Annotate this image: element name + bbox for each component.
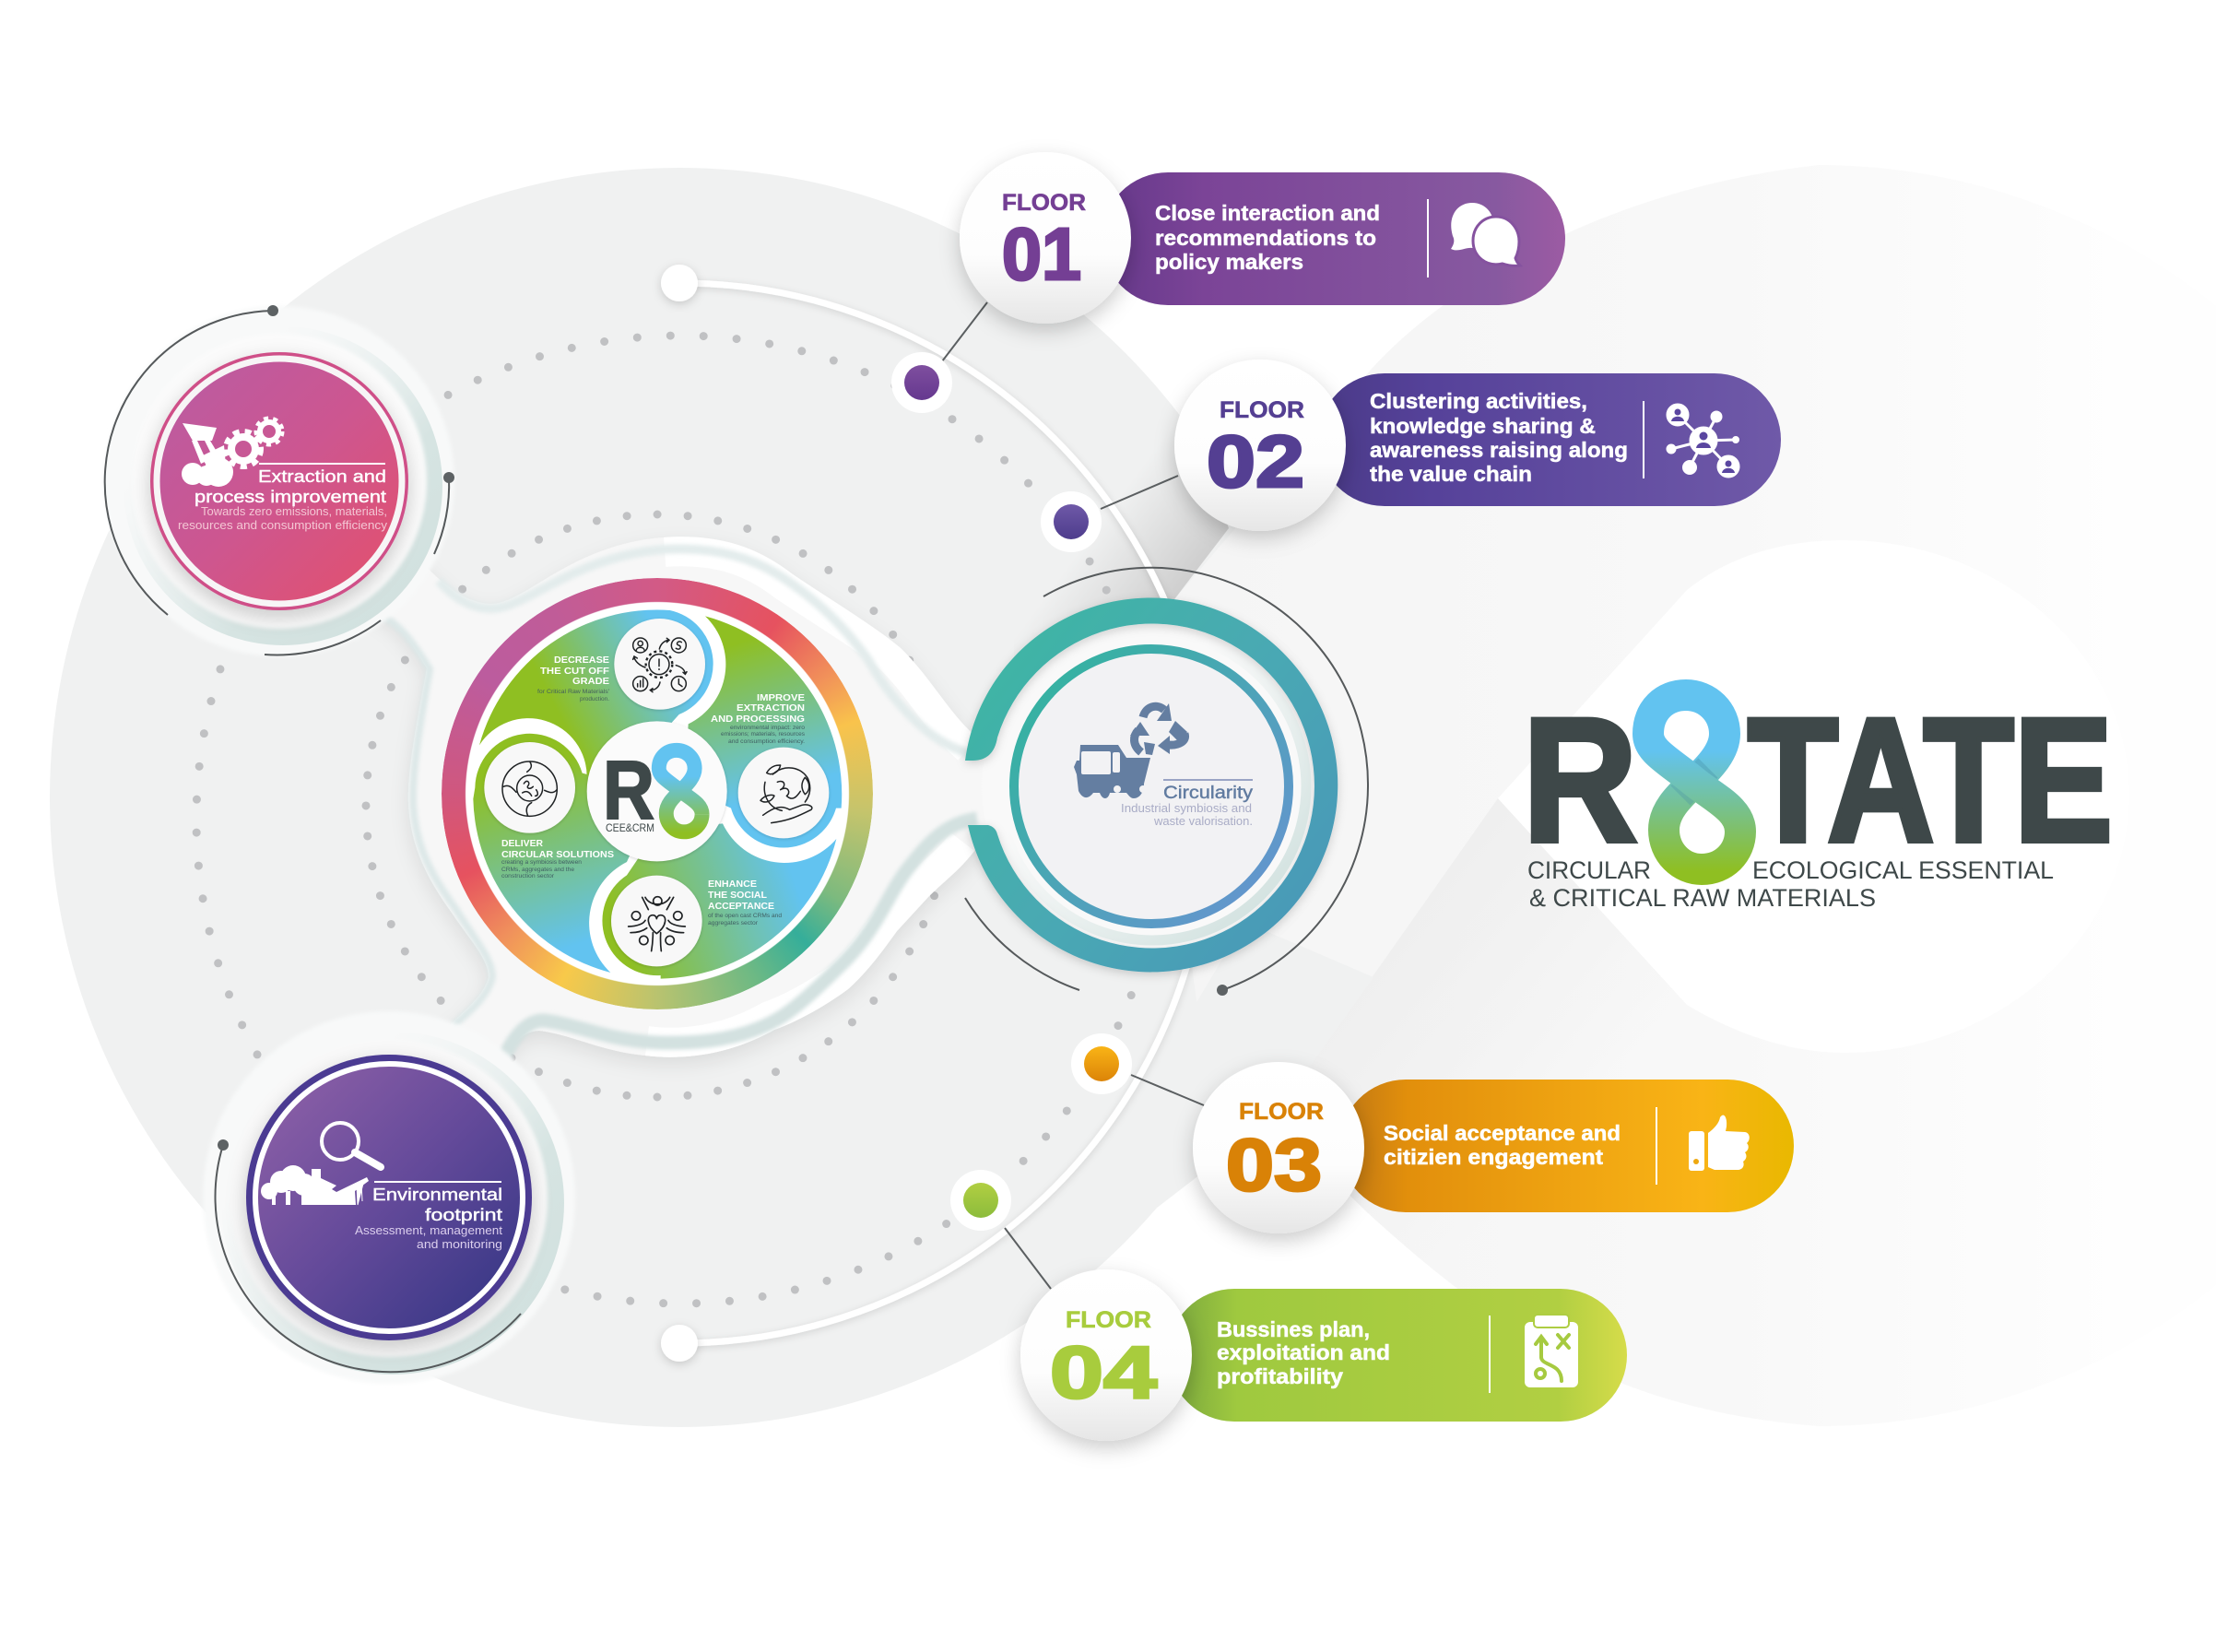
note: creating a symbiosis: construction sector [501,873,555,879]
lower strand, darker near the crossing [1272,798,1844,1427]
description [355,1223,502,1251]
halo: purple circle [203,1011,575,1384]
text: policy makers [1155,250,1303,274]
thin arcs [105,311,1368,1372]
text [1384,1121,1621,1169]
label: decrease the cut off grade [540,655,610,687]
text: profitability [1217,1364,1343,1388]
logo: R8TATE: TATE [1748,682,2113,879]
text: Clustering activities, [1370,389,1587,413]
heading: process improvement [194,488,386,506]
label: deliver circular solutions: DELIVER [501,838,543,849]
note: creating a symbiosis: creating a symbiosis between [501,859,582,866]
heading: footprint [425,1206,502,1224]
label: improve extraction and processing [711,692,805,725]
description: Towards zero emissions, materials, [201,504,387,518]
panel: central wheel [473,610,842,979]
floor 01 connector and dot [891,302,987,413]
badge [1193,1062,1364,1233]
panel: floor 03: 03 [1226,1124,1322,1206]
thin arc end dots [218,305,1228,1150]
note: for critical raw materials: production. [580,696,609,702]
panel: floor 02: 02 [1207,420,1304,502]
connector teal shading: lower edge [500,819,977,1069]
text: awareness raising along [1370,438,1628,462]
icon: thumbs up [1689,1115,1750,1171]
note: for critical raw materials [537,689,609,702]
text: the value chain [1370,462,1532,486]
note: environmental impact: and consumption efficiency. [728,738,805,745]
label: enhance the social acceptance: ENHANCE [708,879,757,890]
outer teal ring [965,597,1338,972]
panel: environmental footprint [246,1055,532,1340]
pale right lobe of infinity shape [1169,165,2216,1426]
floor 02 connector and dot [1041,476,1178,552]
icon: decrease cut off grade [633,638,687,692]
panel: floor 04: FLOOR [1066,1307,1151,1333]
icon: heart with people [629,897,685,951]
note: for critical raw materials: for Critical Raw Materials' [537,689,609,695]
connector teal shading: upper edge [439,549,977,756]
panel: floor 02 [1174,360,1781,531]
label: enhance the social acceptance: THE SOCIAL [708,890,768,901]
description: waste valorisation. [1153,814,1253,828]
icon: clipboard plan [1525,1315,1578,1387]
description: Assessment, management [355,1223,502,1237]
logo: R8TATE [1523,682,2113,912]
note: creating a symbiosis [501,859,582,879]
panel: floor 03 [1193,1062,1794,1233]
text: recommendations to [1155,226,1376,250]
floor 03 connector and dot [1071,1033,1204,1105]
description: Industrial symbiosis and [1121,801,1252,815]
logo: R8 in wheel [603,745,702,837]
text: citizien engagement [1384,1145,1603,1169]
tagline: CIRCULAR [1527,856,1651,884]
text: knowledge sharing & [1370,414,1596,438]
inner dotted circle [366,514,949,1097]
white teardrop behind logo [1498,540,2129,1053]
background shapes and connector network [50,168,1676,1427]
heading: Extraction and [258,467,386,486]
text [1155,201,1380,274]
outer dotted circle [196,336,1164,1304]
panel: floor 04: 04 [1050,1331,1158,1413]
lower extension of big circle [1005,922,1373,1325]
panel: floor 01 [960,152,1565,324]
white arc endpoint: top [661,265,698,301]
note: environmental impact: emissions; materials, resources [721,731,806,738]
label: deliver circular solutions: CIRCULAR SOLUTIONS [501,849,614,860]
panel: floor 02: FLOOR [1220,397,1304,423]
logo: R8 in wheel: R [603,745,654,837]
big grey circle [50,168,1309,1427]
icon: truck and recycling arrows [1074,703,1187,798]
big white arc [679,283,1209,1343]
white arc endpoint: bottom [661,1325,698,1362]
badge [1020,1269,1192,1441]
label: deliver circular solutions [501,838,614,860]
text: Bussines plan, [1217,1317,1370,1341]
logo: R8 in wheel: CEE&CRM [606,821,654,834]
logo: R8TATE: R [1523,682,1637,879]
label: enhance the social acceptance [708,879,774,912]
text: Close interaction and [1155,201,1380,225]
icon: circular globe [502,761,557,816]
gradient ring of central wheel [442,578,873,1009]
connector network [369,537,1014,1079]
panel: extraction and process improvement [150,352,408,610]
note: open cast CRMs [708,913,782,926]
label: improve extraction and processing: IMPROVE [757,692,805,703]
floor 04 connector and dot [950,1170,1051,1289]
text: Social acceptance and [1384,1121,1621,1145]
icon: magnifier and plant [261,1123,381,1205]
label: improve extraction and processing: EXTRACTION [737,702,805,714]
label: improve extraction and processing: AND PROCESSING [711,714,805,725]
icon: loader and gears [182,419,282,487]
panel: floor 01: FLOOR [1002,190,1086,216]
panel: floor 04 [1020,1269,1627,1441]
icon: hand holding globe [760,765,812,823]
text [1370,389,1628,486]
label: decrease the cut off grade: GRADE [572,676,609,687]
description: and monitoring [417,1237,502,1251]
connector teal shading: left side [372,612,492,1027]
label: decrease the cut off grade: DECREASE [554,655,609,666]
crossing shade wedge [1014,387,1229,664]
tagline: ECOLOGICAL ESSENTIAL [1752,856,2054,884]
badge [960,152,1131,324]
icon: speech bubbles [1451,203,1520,266]
wheel blades [473,610,842,979]
logo: figure eight [1648,695,1740,869]
heading [372,1186,502,1224]
label: decrease the cut off grade: THE CUT OFF [540,666,610,677]
panel: floor 01: 01 [1002,213,1081,295]
note: open cast CRMs: of the open cast CRMs and [708,913,782,919]
connector white rim [645,537,977,1057]
description [178,504,388,532]
text: exploitation and [1217,1340,1390,1364]
heading: Circularity [1163,784,1254,803]
description: resources and consumption efficiency [178,518,388,532]
description [1121,801,1253,828]
label: enhance the social acceptance: ACCEPTANCE [708,901,774,912]
icon: network [1667,404,1739,478]
heading: Environmental [372,1186,502,1204]
tagline: & CRITICAL RAW MATERIALS [1529,884,1876,912]
note: environmental impact: environmental impact: zero [730,725,805,731]
halo: pink circle [104,306,454,656]
badge [1174,360,1346,531]
note: creating a symbiosis: CRMs, aggregates and the [501,867,574,873]
inner ring and disc [1014,649,1289,924]
wheel white backing [442,578,873,1009]
tagline [1527,856,2054,912]
panel: circularity [965,597,1338,972]
note: open cast CRMs: aggregates sector [708,920,759,926]
text [1217,1317,1390,1388]
heading [194,467,386,506]
panel: floor 03: FLOOR [1239,1099,1324,1125]
note: environmental impact [721,725,806,745]
